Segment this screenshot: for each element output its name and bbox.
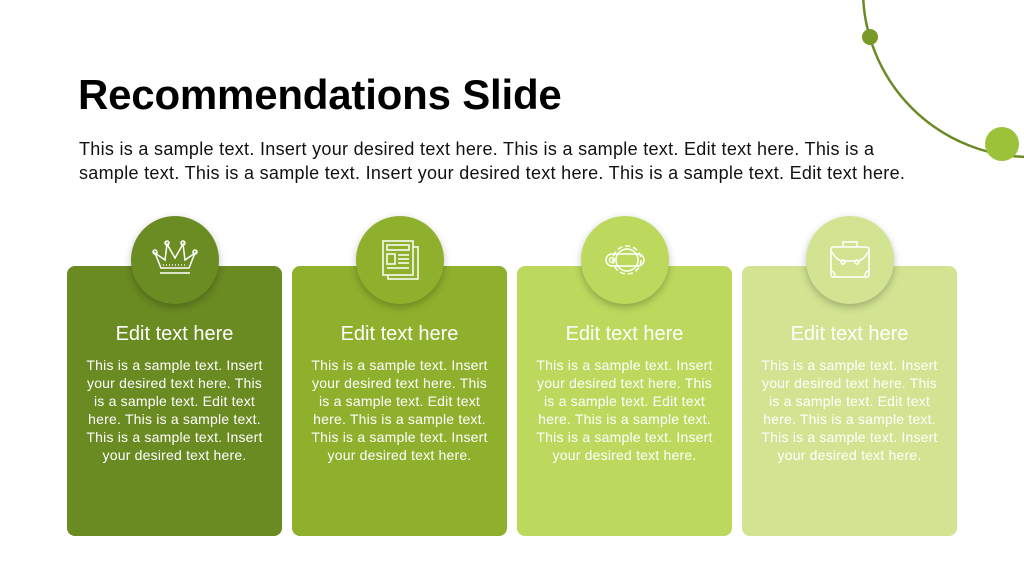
intro text: This is a sample text. Insert your desired text here. This is a sample text. Edit text here. This is a <box>79 139 874 159</box>
panel: card 4: here. This is a sample text. <box>763 411 936 427</box>
icon: crown <box>131 216 219 304</box>
intro text <box>79 139 905 183</box>
icon: newspaper <box>356 216 444 304</box>
panel: card 2: your desired text here. <box>328 447 471 463</box>
title: Recommendations Slide <box>78 71 562 118</box>
panel: card 1: This is a sample text. Insert <box>86 357 263 373</box>
panel: card 2: is a sample text. Edit text <box>319 393 480 409</box>
panel: card 3: Edit text here <box>566 323 683 345</box>
icon: gear wrench <box>581 216 669 304</box>
panel: card 4: This is a sample text. Insert <box>761 429 938 445</box>
panel: card 2: This is a sample text. Insert <box>311 429 488 445</box>
panel: card 2 <box>292 266 507 536</box>
panel: card 3: This is a sample text. Insert <box>536 357 713 373</box>
panel: card 1: here. This is a sample text. <box>88 411 261 427</box>
panel: card 4: This is a sample text. Insert <box>761 357 938 373</box>
panel: card 3: your desired text here. This <box>537 375 712 391</box>
panel: card 3: your desired text here. <box>553 447 696 463</box>
panel: card 2: here. This is a sample text. <box>313 411 486 427</box>
panel: card 2: This is a sample text. Insert <box>311 357 488 373</box>
panel: card 4: your desired text here. This <box>762 375 937 391</box>
panel: card 3: here. This is a sample text. <box>538 411 711 427</box>
panel: card 1: your desired text here. This <box>87 375 262 391</box>
panel: card 4: Edit text here <box>791 323 908 345</box>
icon: briefcase <box>806 216 894 304</box>
panel: card 3 <box>517 266 732 536</box>
intro text: sample text. This is a sample text. Insert your desired text here. This is a sample text. Edit text here. <box>79 163 905 183</box>
panel: card 4 <box>742 266 957 536</box>
panel: card 3: is a sample text. Edit text <box>544 393 705 409</box>
panel: card 4: is a sample text. Edit text <box>769 393 930 409</box>
panel: card 1: This is a sample text. Insert <box>86 429 263 445</box>
panel: card 1: your desired text here. <box>103 447 246 463</box>
panel: card 1: is a sample text. Edit text <box>94 393 255 409</box>
panel: card 4: your desired text here. <box>778 447 921 463</box>
panel: card 2: your desired text here. This <box>312 375 487 391</box>
panel: card 1 <box>67 266 282 536</box>
panel: card 2: Edit text here <box>341 323 458 345</box>
panel: card 1: Edit text here <box>116 323 233 345</box>
panel: card 3: This is a sample text. Insert <box>536 429 713 445</box>
